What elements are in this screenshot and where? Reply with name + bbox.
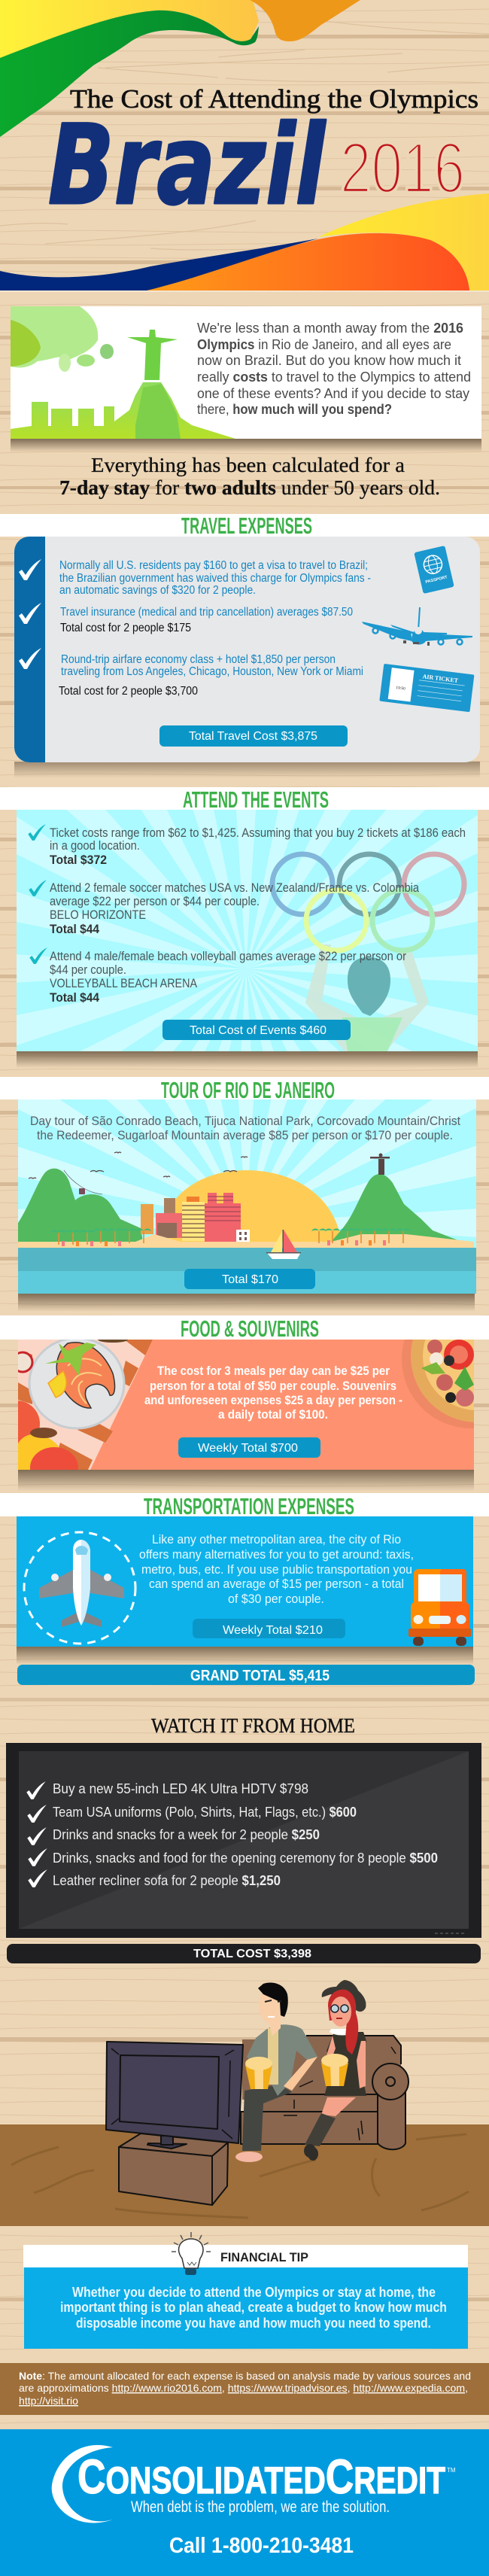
transportation text: metro, bus, etc. If you use public transportation you — [141, 1562, 412, 1577]
total button: Total Cost of Events $460 — [190, 1024, 327, 1037]
total cost bar: TOTAL COST $3,398 — [193, 1948, 311, 1960]
note band: are approximations http://www.rio2016.com, https://www.tripadvisor.es, http://www.expedia.com, — [19, 2382, 468, 2394]
panel: financial tip — [23, 2232, 468, 2349]
icon: airplane in dashed circle — [24, 1532, 135, 1644]
events text: average $22 per person or $44 per couple. — [50, 895, 260, 908]
intro text — [197, 321, 471, 417]
logo: Consolidated Credit: CONSOLIDATEDCREDIT — [77, 2450, 445, 2504]
note band: Note: The amount allocated for each expense is based on analysis made by various sources and — [19, 2370, 471, 2382]
total button: Weekly Total $700 — [198, 1442, 298, 1455]
note band: http://visit.rio — [19, 2395, 78, 2407]
food text: person for a total of $50 per couple. Souvenirs — [150, 1379, 396, 1393]
logo: Consolidated Credit: When debt is the problem, we are the solution. — [131, 2498, 390, 2516]
events text: VOLLEYBALL BEACH ARENA — [50, 977, 197, 990]
tour text: the Redeemer, Sugarloaf Mountain average $85 per person or $170 per couple. — [37, 1128, 453, 1142]
total button — [159, 725, 348, 747]
travel text: Travel insurance (medical and trip cancellation) averages $87.50 — [60, 606, 353, 619]
events text: Attend 2 female soccer matches USA vs. New Zealand/France vs. Colombia — [50, 881, 420, 895]
events text: Attend 4 male/female beach volleyball games average $22 per person or — [50, 950, 406, 963]
tip text — [60, 2285, 447, 2331]
total button — [178, 1437, 320, 1458]
illustration: couple watching TV — [0, 1980, 489, 2226]
logo: Consolidated Credit — [52, 2445, 456, 2523]
logo: Consolidated Credit: TM — [447, 2467, 456, 2474]
grand total bar — [17, 1665, 475, 1685]
icon: air ticket: AIR TICKET — [422, 673, 459, 684]
events text: Total $44 — [50, 923, 100, 936]
total button: Total Travel Cost $3,875 — [189, 730, 317, 743]
list text: Drinks and snacks for a week for 2 people $250 — [53, 1827, 320, 1842]
food text: and unforeseen expenses $25 a day per person - — [144, 1393, 402, 1407]
tour text — [30, 1114, 460, 1142]
callout: calculation basis — [59, 454, 440, 499]
events text: Total $372 — [50, 853, 107, 867]
events text: $44 per couple. — [50, 963, 126, 977]
icon: air ticket: 19:50 — [396, 686, 405, 692]
intro text: now on Brazil. But do you know how much it — [197, 353, 461, 368]
illustration: fan holding Olympic rings — [272, 854, 464, 1054]
icon: passport: PASSPORT — [425, 575, 448, 585]
panel: introduction — [11, 306, 481, 452]
illustration: watercolor Christ the Redeemer — [11, 306, 235, 439]
tip text: important thing is to plan ahead, create a budget to know how much — [60, 2300, 447, 2315]
total button: Total $170 — [222, 1273, 278, 1286]
illustration: table with plate of salmon and pizza — [0, 1290, 489, 1488]
intro text: one of these events? And if you decide to stay — [197, 386, 469, 401]
travel text — [59, 559, 371, 698]
events text — [50, 826, 466, 1005]
travel text: Round-trip airfare economy class + hotel $1,850 per person — [61, 653, 336, 666]
total button — [184, 1269, 315, 1289]
total cost bar — [7, 1944, 481, 1963]
television — [106, 2042, 243, 2149]
icon: bus — [409, 1569, 471, 1646]
transportation text: of $30 per couple. — [228, 1592, 324, 1606]
tour text: Day tour of São Conrado Beach, Tijuca National Park, Corcovado Mountain/Christ — [30, 1114, 460, 1128]
list text: Team USA uniforms (Polo, Shirts, Hat, Flags, etc.) $600 — [53, 1805, 357, 1820]
TV stand — [119, 2133, 228, 2205]
note band — [0, 2363, 489, 2415]
banner ribbons — [0, 0, 489, 290]
transportation text — [139, 1532, 414, 1606]
callout: calculation basis: Everything has been calculated for a — [91, 454, 405, 476]
checkmarks — [19, 559, 41, 669]
events text: in a good location. — [50, 839, 140, 853]
icon: light bulb — [172, 2232, 211, 2275]
total button: Weekly Total $210 — [223, 1624, 323, 1637]
woman — [304, 1980, 366, 2161]
intro text: Olympics in Rio de Janeiro, and all eyes are — [197, 337, 451, 352]
list text: Drinks, snacks and food for the opening ceremony for 8 people $500 — [53, 1851, 438, 1866]
travel text: traveling from Los Angeles, Chicago, Houston, New York or Miami — [61, 665, 363, 678]
panel: tour of Rio de Janeiro — [0, 734, 489, 1712]
grand total bar: GRAND TOTAL $5,415 — [190, 1668, 330, 1684]
checkmarks — [26, 1781, 47, 1887]
icon: passport — [414, 546, 454, 594]
transportation text: offers many alternatives for you to get around: taxis, — [139, 1547, 414, 1562]
total button — [193, 1619, 345, 1638]
icon: air ticket — [379, 664, 474, 712]
intro text: really costs to travel to the Olympics to attend — [197, 370, 471, 385]
tip text: disposable income you have and how much you need to spend. — [76, 2316, 431, 2331]
checkmarks — [28, 824, 47, 964]
intro text: We're less than a month away from the 2016 — [197, 321, 463, 336]
food text: The cost for 3 meals per day can be $25 per — [157, 1364, 390, 1378]
panel: travel expenses — [0, 512, 489, 778]
tip text: Whether you decide to attend the Olympics or stay at home, the — [72, 2285, 436, 2300]
transportation text: Like any other metropolitan area, the city of Rio — [152, 1532, 401, 1547]
food text — [144, 1364, 402, 1422]
list text: Leather recliner sofa for 2 people $1,250 — [53, 1873, 281, 1888]
panel: attend the events — [0, 787, 489, 1067]
icon: airplane — [362, 607, 472, 646]
heading: travel expenses: TRAVEL EXPENSES — [181, 512, 312, 539]
heading: attend the events: ATTEND THE EVENTS — [183, 786, 329, 813]
transportation text: can spend an average of $15 per person - a total — [149, 1577, 404, 1591]
total button — [162, 1020, 351, 1040]
title: The Cost of Attending the Olympics — [70, 84, 478, 114]
panel: food and souvenirs — [0, 1315, 489, 1489]
heading: watch it from home: WATCH IT FROM HOME — [151, 1714, 355, 1737]
travel text: an automatic savings of $320 for 2 people. — [59, 584, 256, 597]
footer — [0, 2429, 489, 2576]
tip heading: FINANCIAL TIP — [220, 2250, 308, 2264]
list text — [53, 1781, 438, 1888]
man — [235, 1983, 317, 2162]
panel: transportation expenses — [0, 1493, 489, 1665]
food text: a daily total of $100. — [218, 1407, 328, 1422]
events text: Total $44 — [50, 991, 100, 1005]
heading: food and souvenirs: FOOD & SOUVENIRS — [181, 1315, 319, 1342]
travel text: the Brazilian government has waived this charge for Olympics fans - — [59, 572, 371, 585]
travel text: Total cost for 2 people $175 — [60, 622, 191, 634]
travel text: Normally all U.S. residents pay $160 to get a visa to travel to Brazil; — [59, 559, 368, 572]
sofa — [241, 2036, 409, 2149]
heading: transportation expenses: TRANSPORTATION EXPENSES — [144, 1493, 354, 1519]
heading: tour of Rio: TOUR OF RIO DE JANEIRO — [161, 1077, 335, 1103]
callout: calculation basis: 7-day stay for two adults under 50 years old. — [59, 476, 440, 499]
popcorn buckets — [245, 2054, 348, 2089]
list text: Buy a new 55-inch LED 4K Ultra HDTV $798 — [53, 1781, 308, 1796]
illustration: Rio skyline — [18, 1099, 476, 1294]
travel text: Total cost for 2 people $3,700 — [59, 685, 198, 698]
phone number: Call 1-800-210-3481 — [169, 2534, 354, 2558]
events text: BELO HORIZONTE — [50, 908, 146, 922]
title: Brazil — [48, 102, 327, 230]
panel: television list — [6, 1743, 481, 1938]
intro text: there, how much will you spend? — [197, 402, 392, 417]
